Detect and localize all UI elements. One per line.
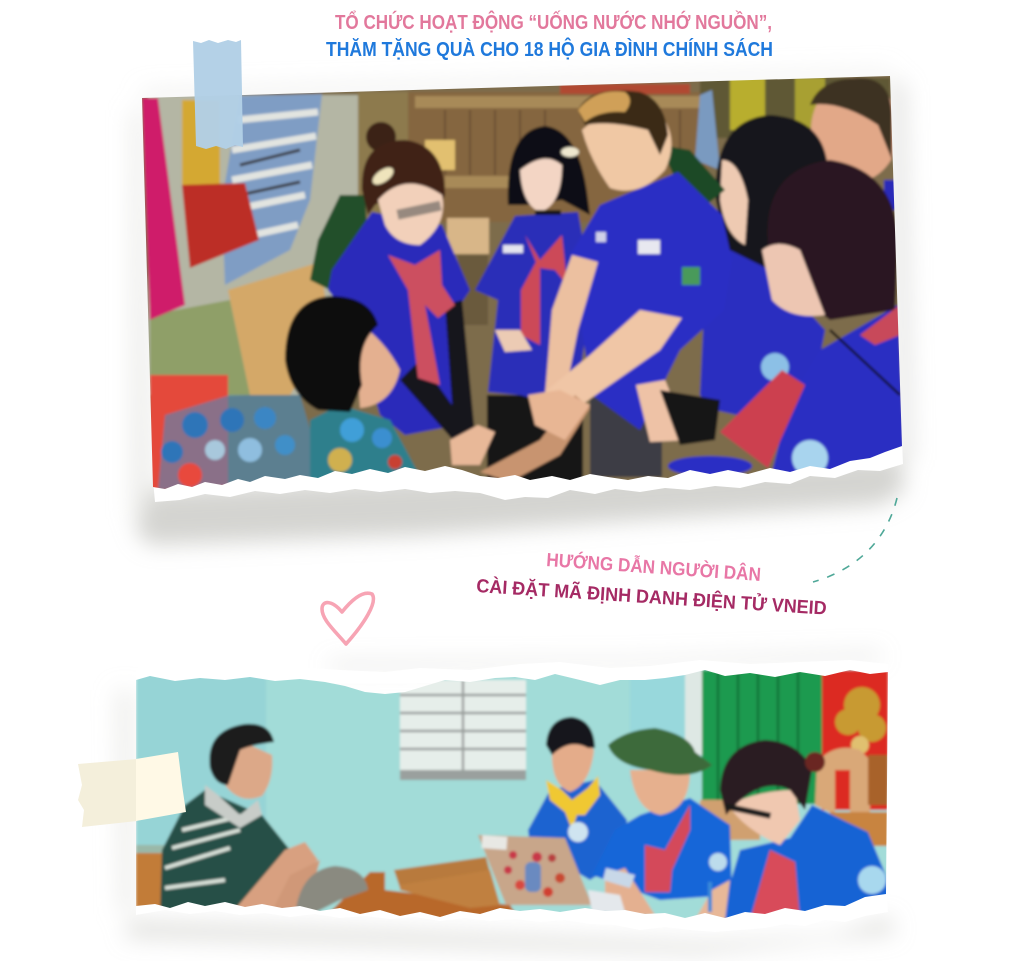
title line pink: TỔ CHỨC HOẠT ĐỘNG “UỐNG NƯỚC NHỚ NGUỒN”,: [335, 10, 772, 34]
box: [447, 218, 489, 254]
girl with glasses: [695, 740, 888, 920]
girl 2: [475, 126, 592, 485]
wooden shelf: [358, 92, 408, 218]
green bag behind: [668, 146, 726, 204]
boy yellow collar: [528, 717, 627, 880]
calendar: [182, 100, 220, 185]
elderly woman: [285, 296, 422, 490]
dashed connector: [813, 498, 897, 582]
heading: second activity: [476, 549, 827, 620]
photo: guiding residents to install VNeID: [136, 665, 888, 920]
orange board: [228, 262, 330, 395]
gold plant: [835, 687, 886, 754]
torn white paper edge: top photo: [153, 440, 903, 502]
boy arms: [545, 255, 598, 395]
man top right: [810, 78, 900, 210]
striped blanket: [222, 94, 322, 285]
paper shadows: bottom photo: [115, 652, 895, 954]
top right wall: [700, 78, 890, 138]
wooden chair and table: [815, 748, 870, 815]
heading line maroon: CÀI ĐẶT MÃ ĐỊNH DANH ĐIỆN TỬ VNEID: [476, 575, 827, 620]
left wood panel: [136, 851, 164, 906]
boy: [535, 90, 732, 477]
clasped hands and arm: [450, 390, 590, 482]
photo: volunteers greeting an elderly woman: [140, 70, 910, 510]
torn white paper edge: bottom of bottom photo: [136, 885, 888, 932]
man in striped shirt: [160, 724, 320, 915]
title: first activity: [326, 10, 773, 61]
heading line pink: HƯỚNG DẪN NGƯỜI DÂN: [546, 549, 762, 586]
boy with green hat: [592, 728, 732, 915]
cap on desk: [295, 866, 368, 915]
box and cellophane bouquet: [150, 375, 325, 490]
torn white paper edge: top of bottom photo: [136, 660, 888, 685]
tape outside photo: [78, 759, 137, 827]
pink banner: [142, 98, 185, 320]
teal wall: [264, 670, 887, 918]
top goods: [560, 84, 690, 94]
tape over photo: [136, 752, 186, 821]
desks: [322, 857, 520, 920]
window: [400, 680, 526, 780]
chain fence: [148, 95, 358, 395]
red backdrop: [822, 670, 888, 810]
woman girl 3: [700, 115, 830, 420]
icon: heart: [322, 593, 373, 644]
green curtain: [702, 670, 824, 804]
cream tape: [78, 752, 186, 827]
background shack: [140, 70, 910, 510]
laptop: [478, 835, 625, 912]
title line blue: THĂM TẶNG QUÀ CHO 18 HỘ GIA ĐÌNH CHÍNH SÁCH: [326, 37, 773, 61]
girl 1: [310, 122, 477, 448]
paper shadows: top photo: [130, 70, 912, 545]
blue tape: [193, 40, 243, 149]
right woman: [636, 160, 905, 480]
